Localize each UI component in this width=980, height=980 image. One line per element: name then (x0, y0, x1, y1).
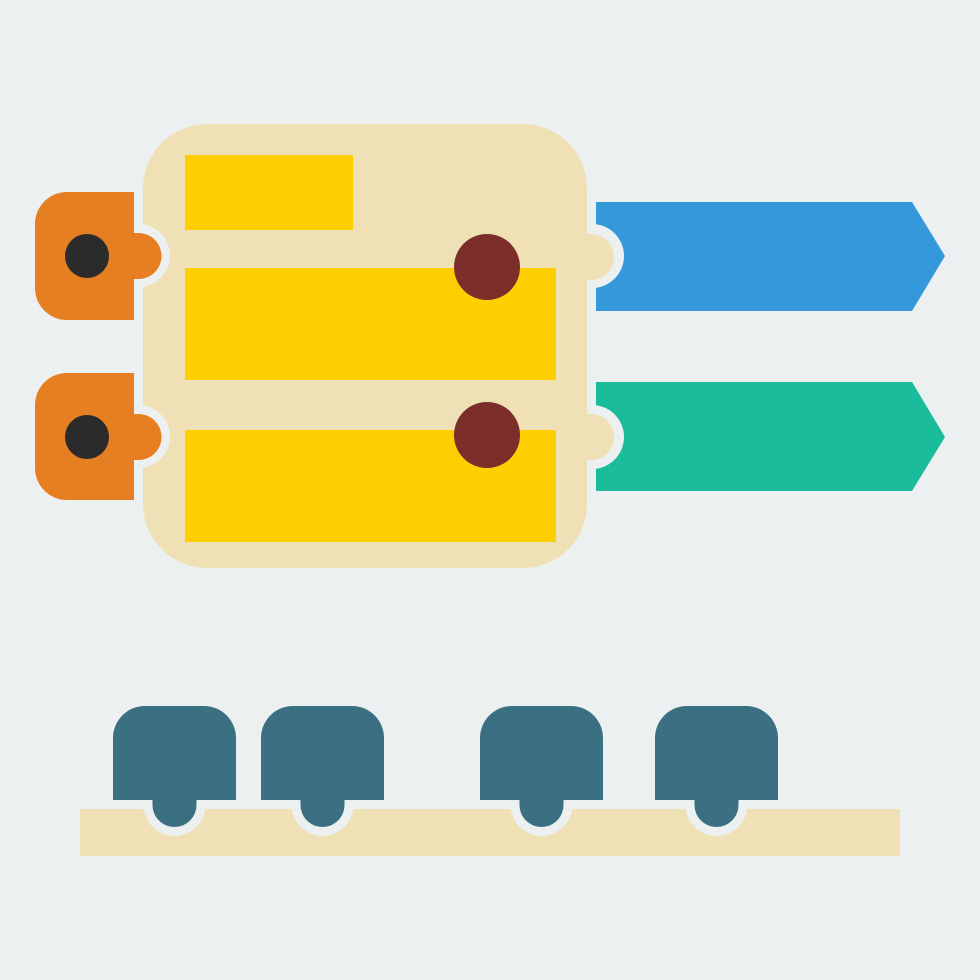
icon: upper maroon dot (454, 234, 520, 300)
icon: teal block 1 (113, 706, 236, 836)
icon: lower maroon dot (454, 402, 520, 468)
icon: lower orange puzzle tab (35, 373, 170, 500)
panel: central beige rounded board (143, 124, 587, 568)
panel: bottom beige rail (80, 809, 900, 856)
panel: lower yellow block (185, 430, 556, 542)
panel: top yellow block (185, 155, 353, 230)
arrow: green ribbon (568, 382, 945, 491)
arrow: blue ribbon (568, 202, 945, 311)
icon: teal block 2 (261, 706, 384, 836)
icon: upper orange puzzle tab (35, 192, 170, 320)
icon: teal block 3 (480, 706, 603, 836)
panel: middle yellow block (185, 268, 556, 380)
icon: teal block 4 (655, 706, 778, 836)
